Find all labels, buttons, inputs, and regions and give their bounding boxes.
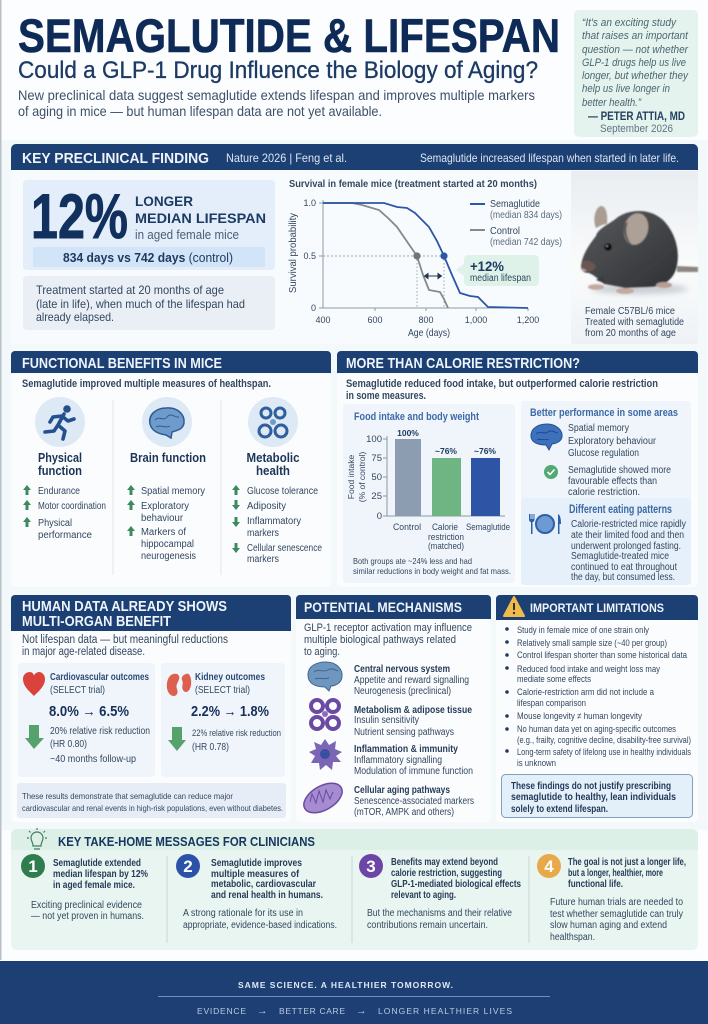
card: cardiovascular outcomes: 20% relative risk reduction <box>50 726 150 737</box>
functional benefits header: FUNCTIONAL BENEFITS IN MICE <box>22 355 222 372</box>
bar chart: food intake: 75 <box>371 453 382 464</box>
survival chart: Survival in female mice (treatment started at 20 months) <box>289 178 537 190</box>
message 1: in aged female mice. <box>53 880 135 891</box>
card: cardiovascular outcomes: (SELECT trial) <box>50 685 105 696</box>
icon: light bulb <box>27 828 47 849</box>
column: physical function: Physical <box>38 518 72 529</box>
panel: better performance: Better performance in some areas <box>530 407 678 419</box>
message 4 <box>537 854 686 943</box>
mouse photo panel: from 20 months of age <box>585 328 676 339</box>
message 1: median lifespan by 12% <box>53 869 148 880</box>
bar chart: food intake: ~76% <box>435 446 457 456</box>
panel: better performance: calorie restriction. <box>568 487 640 498</box>
message 1 <box>21 854 148 922</box>
mechanism: central nervous system: Neurogenesis (preclinical) <box>354 686 451 697</box>
panel: better performance: Glucose regulation <box>568 448 639 459</box>
column: metabolic health: Glucose tolerance <box>247 486 318 497</box>
column: metabolic health: Cellular senescence <box>247 543 322 554</box>
column: metabolic health <box>232 397 322 565</box>
column: metabolic health: markers <box>247 528 279 539</box>
column: metabolic health: markers <box>247 554 279 565</box>
stat card: 12%: 12% <box>31 182 128 252</box>
footer: → <box>257 1005 268 1017</box>
panel: different eating patterns: Different eating patterns <box>569 502 672 516</box>
chart legend: (median 834 days) <box>490 210 562 221</box>
icon: mouse <box>581 206 698 294</box>
limitations list: Reduced food intake and weight loss may <box>517 664 660 674</box>
icon: brain <box>308 662 342 691</box>
card: cardiovascular outcomes: 8.0% → 6.5% <box>49 703 129 720</box>
column: metabolic health: Inflammatory <box>247 516 301 527</box>
survival chart: Age (days) <box>408 328 450 339</box>
column: physical function: Endurance <box>38 486 80 497</box>
limitations header <box>496 595 698 620</box>
callout: +12% <box>456 255 539 286</box>
bar chart: food intake: 100% <box>397 428 419 438</box>
column: brain function <box>127 397 206 562</box>
panel: key take-home messages: KEY TAKE-HOME MESSAGES FOR CLINICIANS <box>58 834 315 849</box>
message 4: but a longer, healthier, more <box>568 868 663 879</box>
bar chart: food intake: 0 <box>377 511 382 522</box>
human data header: MULTI-ORGAN BENEFIT <box>22 613 171 630</box>
icon: runner <box>35 397 85 447</box>
message 2: 2 <box>183 857 193 876</box>
panel: human data: in major age-related disease. <box>22 646 145 658</box>
panel: potential mechanisms <box>296 595 491 822</box>
message 2 <box>176 854 337 931</box>
panel: quote: longer, but whether they <box>582 70 689 82</box>
bar chart: food intake: 25 <box>371 491 382 502</box>
message 4: slow human aging and extend <box>550 920 667 931</box>
note: human data summary <box>17 783 286 818</box>
bar chart: food intake: restriction <box>428 532 464 542</box>
icon: down arrow <box>168 727 186 751</box>
functional benefits header <box>11 351 331 373</box>
mechanism: inflammation and immunity: Inflammation & immunity <box>354 744 458 755</box>
icon: plate and cutlery <box>529 514 561 534</box>
panel: quote: better health.” <box>582 97 642 109</box>
card: kidney outcomes: (SELECT trial) <box>195 685 250 696</box>
message 2: Semaglutide improves <box>211 858 302 869</box>
column: brain function: behaviour <box>141 513 184 524</box>
bar chart: food intake: Control <box>393 522 421 532</box>
panel: better performance: Semaglutide showed more <box>568 465 671 476</box>
column: metabolic health: Adiposity <box>247 501 286 512</box>
column: brain function: hippocampal <box>141 539 194 550</box>
column: brain function: Spatial memory <box>141 486 205 497</box>
survival chart: 1,000 <box>465 315 487 325</box>
icon: purple cells <box>311 700 339 729</box>
survival chart: 1.0 <box>303 198 316 208</box>
column: brain function: neurogenesis <box>141 551 196 562</box>
survival chart: 600 <box>367 315 383 325</box>
column: physical function: performance <box>38 530 92 541</box>
survival chart: 1,200 <box>517 315 539 325</box>
bar chart: food intake <box>343 404 515 583</box>
panel: human data: Not lifespan data — but meaningful reductions <box>22 634 228 646</box>
message 4: 4 <box>544 857 554 876</box>
message 3: relevant to aging. <box>391 890 456 901</box>
panel: different eating patterns: underwent prolonged fasting. <box>571 541 681 552</box>
text card: treatment timing: already elapsed. <box>36 310 114 324</box>
panel: different eating patterns <box>521 498 691 585</box>
footer: BETTER CARE <box>279 1006 345 1016</box>
text card: treatment timing <box>23 276 275 330</box>
message 1: Exciting preclinical evidence <box>31 900 142 911</box>
mechanism: inflammation and immunity: Modulation of immune function <box>354 766 473 777</box>
panel: key preclinical finding <box>11 144 698 344</box>
panel: better performance: favourable effects than <box>568 476 657 487</box>
message 1: — not yet proven in humans. <box>31 911 144 922</box>
panel: different eating patterns: ate their limited food and then <box>571 530 684 541</box>
mechanism: metabolism and adipose tissue: Metabolism & adipose tissue <box>354 705 472 716</box>
panel: quote: — PETER ATTIA, MD <box>588 111 685 123</box>
card: kidney outcomes: Kidney outcomes <box>195 672 265 683</box>
icon: brain <box>142 397 192 447</box>
message 3: contributions remain uncertain. <box>367 920 488 931</box>
column: physical function <box>23 397 106 541</box>
panel: better performance <box>521 401 691 585</box>
message 1: 1 <box>28 857 38 876</box>
footer: EVIDENCE <box>197 1006 246 1016</box>
column: brain function: Brain function <box>130 450 206 465</box>
mechanism: cellular aging pathways <box>299 777 474 819</box>
card: kidney outcomes: 2.2% → 1.8% <box>191 703 269 720</box>
mechanism: metabolism and adipose tissue: Insulin sensitivity <box>354 715 419 726</box>
text card: treatment timing: Treatment started at 20 months of age <box>36 283 224 297</box>
message 3 <box>359 854 521 931</box>
column: physical function: function <box>38 463 82 478</box>
panel: human data <box>11 595 291 822</box>
panel: key take-home messages <box>11 828 698 950</box>
message 4: test whether semaglutide can truly <box>550 909 683 920</box>
footer: SAME SCIENCE. A HEALTHIER TOMORROW. <box>238 980 453 990</box>
human data header <box>11 595 291 631</box>
message 4: functional life. <box>568 879 623 890</box>
message 1: Semaglutide extended <box>53 858 141 869</box>
limitations list: Mouse longevity ≠ human longevity <box>517 711 642 721</box>
message 2: multiple measures of <box>211 869 300 880</box>
panel: different eating patterns: the day, but consumed less. <box>571 572 675 583</box>
message 2: and renal health in humans. <box>211 890 323 901</box>
icon: brain <box>531 424 562 450</box>
panel: functional benefits in mice: Semaglutide improved multiple measures of healthspan. <box>22 378 271 390</box>
panel: quote: that raises an important <box>582 30 689 42</box>
card: cardiovascular outcomes <box>18 663 155 777</box>
panel: more than calorie restriction <box>337 351 698 587</box>
column: brain function: Exploratory <box>141 501 189 512</box>
survival chart: 0 <box>311 303 316 313</box>
panel: different eating patterns: continued to eat throughout <box>571 562 677 573</box>
message 4: Future human trials are needed to <box>550 897 683 908</box>
icon: heart <box>23 672 45 696</box>
intro text <box>18 87 535 119</box>
card: cardiovascular outcomes: Cardiovascular outcomes <box>50 672 149 683</box>
bar chart: food intake: (matched) <box>428 541 464 551</box>
human data header: HUMAN DATA ALREADY SHOWS <box>22 598 227 615</box>
chart legend: Control <box>490 226 520 237</box>
mechanism: metabolism and adipose tissue <box>311 700 472 738</box>
icon: immune cell <box>309 739 342 770</box>
column: physical function: Physical <box>38 450 82 465</box>
chart legend <box>470 199 562 248</box>
intro text: New preclinical data suggest semaglutide extends lifespan and improves multiple markers <box>18 87 535 103</box>
callout: prescribing warning <box>502 774 692 818</box>
title: SEMAGLUTIDE & LIFESPAN <box>18 9 560 62</box>
mechanism: central nervous system <box>308 662 469 697</box>
limitations list: is unknown <box>517 758 556 768</box>
message 3: 3 <box>366 857 376 876</box>
column: metabolic health: health <box>256 463 290 478</box>
panel: potential mechanisms: multiple biological pathways related <box>304 634 456 646</box>
card: kidney outcomes <box>161 663 285 777</box>
panel: more than calorie restriction: Semaglutide reduced food intake, but outperformed calorie restriction <box>346 378 658 390</box>
panel: more than calorie restriction: in some measures. <box>346 390 426 402</box>
bar chart: food intake: Calorie <box>432 522 458 532</box>
bar chart: food intake: 50 <box>371 472 382 483</box>
mechanism: inflammation and immunity: Inflammatory signalling <box>354 755 442 766</box>
panel: potential mechanisms: GLP-1 receptor activation may influence <box>304 622 472 634</box>
survival chart: 400 <box>315 315 331 325</box>
note: human data summary: These results demonstrate that semaglutide can reduce major <box>22 791 233 801</box>
bar chart: food intake: (% of control) <box>357 452 367 502</box>
panel: functional benefits in mice <box>11 351 331 587</box>
chart legend: Semaglutide <box>490 199 540 210</box>
stat card: 12%: MEDIAN LIFESPAN <box>135 210 266 226</box>
bar chart: food intake: Food intake <box>346 455 356 499</box>
survival chart: 800 <box>418 315 434 325</box>
limitations header: IMPORTANT LIMITATIONS <box>530 601 664 615</box>
panel: important limitations <box>496 595 698 822</box>
column: physical function: Motor coordination <box>38 501 106 512</box>
chart legend: (median 742 days) <box>490 237 562 248</box>
stat card: 12%: 834 days vs 742 days (control) <box>63 250 233 265</box>
key finding header <box>11 144 698 170</box>
card: kidney outcomes: 22% relative risk reduction <box>192 728 281 739</box>
stat card: 12% <box>23 180 275 270</box>
callout: prescribing warning: semaglutide to healthy, lean individuals <box>511 791 676 803</box>
message 3: But the mechanisms and their relative <box>367 908 512 919</box>
mechanism: metabolism and adipose tissue: Nutrient sensing pathways <box>354 727 454 738</box>
mechanisms header <box>296 595 491 619</box>
icon: warning triangle <box>504 597 524 616</box>
stat card: 12%: in aged female mice <box>135 227 239 242</box>
panel: different eating patterns: Semaglutide-treated mice <box>571 551 669 562</box>
callout: prescribing warning: These findings do not justify prescribing <box>511 780 671 792</box>
bar chart: food intake: 100 <box>366 434 382 445</box>
limitations list: lifespan comparison <box>517 698 586 708</box>
mouse photo panel: Female C57BL/6 mice <box>585 306 675 317</box>
message 3: calorie restriction, suggesting <box>391 868 502 879</box>
bar chart: food intake: Both groups ate ~24% less and had <box>353 556 472 566</box>
panel: quote: “It's an exciting study <box>582 17 677 29</box>
bar chart: food intake: Food intake and body weight <box>354 411 479 423</box>
mouse photo panel: Treated with semaglutide <box>585 317 684 328</box>
survival chart: 0.5 <box>303 251 316 261</box>
mechanism: cellular aging pathways: Senescence-associated markers <box>354 796 474 807</box>
survival chart <box>288 178 562 339</box>
limitations list <box>505 625 691 768</box>
key finding header: Nature 2026 | Feng et al. <box>226 151 347 165</box>
card: cardiovascular outcomes: ~40 months follow-up <box>50 754 136 765</box>
subtitle: Could a GLP-1 Drug Influence the Biology of Aging? <box>18 57 538 84</box>
card: kidney outcomes: (HR 0.78) <box>192 742 229 753</box>
message 2: appropriate, evidence-based indications. <box>183 920 337 931</box>
mouse photo panel <box>571 171 698 344</box>
mechanisms header: POTENTIAL MECHANISMS <box>304 599 462 615</box>
panel: quote <box>574 10 698 137</box>
panel: potential mechanisms: to aging. <box>304 646 340 658</box>
panel: quote: help us live longer in <box>582 83 670 95</box>
note: human data summary: cardiovascular and renal events in high-risk populations, even without diabetes. <box>22 803 283 813</box>
mechanism: cellular aging pathways: Cellular aging pathways <box>354 785 450 796</box>
limitations list: Relatively small sample size (~40 per group) <box>517 638 667 648</box>
limitations list: Calorie-restriction arm did not include a <box>517 687 654 697</box>
panel: quote: September 2026 <box>600 123 673 135</box>
text card: treatment timing: (late in life), when much of the lifespan had <box>36 297 245 311</box>
limitations list: Study in female mice of one strain only <box>517 625 649 635</box>
message 3: GLP-1-mediated biological effects <box>391 879 521 890</box>
icon: down arrow <box>25 725 44 749</box>
mechanism: cellular aging pathways: (mTOR, AMPK and others) <box>354 807 454 818</box>
limitations list: mediate some effects <box>517 674 591 684</box>
message 2: metabolic, cardiovascular <box>211 879 316 890</box>
calorie restriction header: MORE THAN CALORIE RESTRICTION? <box>346 355 580 372</box>
icon: mitochondrion <box>299 777 347 819</box>
intro text: of aging in mice — but human lifespan data are not yet available. <box>18 103 382 119</box>
panel: better performance: Exploratory behaviour <box>568 436 657 447</box>
column: brain function: Markers of <box>141 527 186 538</box>
panel: better performance: Spatial memory <box>568 423 629 434</box>
mechanism: inflammation and immunity <box>309 739 473 777</box>
stat card: 12%: LONGER <box>135 193 193 209</box>
icon: check <box>544 465 558 479</box>
bar chart: food intake: ~76% <box>474 446 496 456</box>
mechanism: central nervous system: Central nervous system <box>354 664 450 675</box>
message 3: Benefits may extend beyond <box>391 857 498 868</box>
panel: quote: question — not whether <box>582 44 689 56</box>
callout: prescribing warning: solely to extend lifespan. <box>511 803 608 815</box>
footer <box>0 961 708 1024</box>
survival chart: Survival probability <box>288 213 299 293</box>
column: metabolic health: Metabolic <box>246 450 300 465</box>
panel: different eating patterns: Calorie-restricted mice rapidly <box>571 519 686 530</box>
mechanism: central nervous system: Appetite and reward signalling <box>354 675 469 686</box>
callout: +12%: median lifespan <box>470 273 531 284</box>
calorie restriction header <box>337 351 698 373</box>
bar chart: food intake: similar reductions in body weight and fat mass. <box>353 566 511 576</box>
icon: kidneys <box>167 674 191 696</box>
footer: → <box>356 1005 366 1017</box>
footer: LONGER HEALTHIER LIVES <box>378 1006 512 1016</box>
panel: quote: GLP-1 drugs help us live <box>582 57 686 69</box>
callout: +12%: +12% <box>470 258 505 274</box>
icon: cells <box>248 397 298 447</box>
message 4: healthspan. <box>550 932 595 943</box>
card: cardiovascular outcomes: (HR 0.80) <box>50 739 87 750</box>
limitations list: No human data yet on aging-specific outcomes <box>517 724 676 734</box>
message 2: A strong rationale for its use in <box>183 908 303 919</box>
bar chart: food intake: Semaglutide <box>466 522 510 533</box>
limitations list: Control lifespan shorter than some historical data <box>517 650 687 660</box>
key finding header: KEY PRECLINICAL FINDING <box>22 150 209 167</box>
